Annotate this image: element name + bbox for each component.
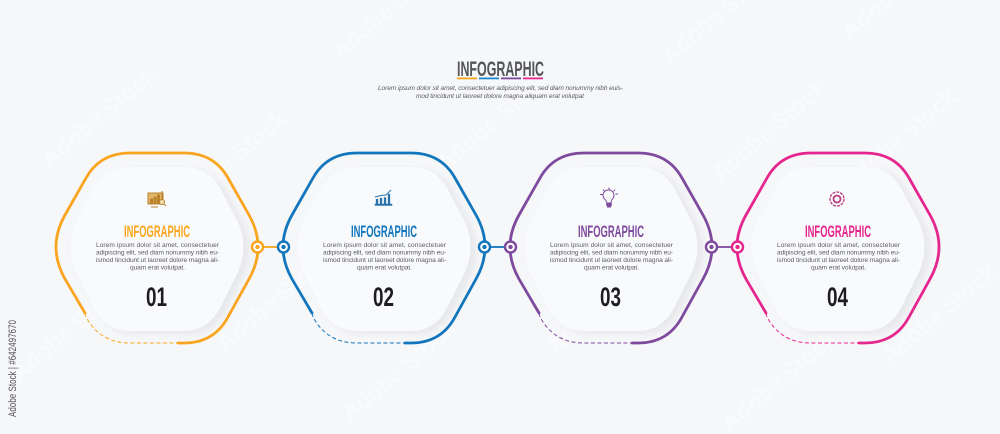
watermarks: Adobe Stock [167, 105, 291, 216]
icon: light bulb [600, 188, 618, 207]
description 3: adipiscing elit, sed diam nonummy nibh eu- [550, 250, 673, 256]
inner hexagon card 1 [70, 167, 244, 331]
watermarks: Adobe Stock [707, 75, 831, 186]
description 2: ismod tincidunt ut laoreet dolore magna ali- [323, 257, 446, 264]
description 2: Lorem ipsum dolor sit amet, consectetuer [323, 242, 447, 249]
watermarks: Adobe Stock [37, 61, 161, 172]
watermarks: Adobe Stock [7, 275, 131, 386]
subtitle [378, 85, 624, 100]
icon: gear [830, 192, 844, 206]
connector: step 2 to 3 [479, 242, 516, 252]
number 4: 04 [827, 282, 848, 312]
watermarks: Adobe Stock [837, 83, 961, 194]
heading 1: INFOGRAPHIC [124, 223, 190, 241]
description 1: quam erat volutpat. [130, 264, 185, 272]
dashed segment 4 [766, 313, 859, 343]
stock credit: Adobe Stock | #642497670 [7, 320, 19, 417]
connector: step 1 to 2 [252, 242, 289, 252]
subtitle: mod tincidunt ut laoreet dolore magna aliquam erat volutpat [416, 93, 585, 100]
panel: step 1 [56, 153, 258, 343]
dashed segment 2 [312, 313, 405, 343]
description 1: ismod tincidunt ut laoreet dolore magna ali- [96, 257, 219, 264]
watermarks: Adobe Stock [432, 65, 556, 176]
description 3: ismod tincidunt ut laoreet dolore magna ali- [550, 257, 673, 264]
description 1 [96, 242, 220, 272]
number 3: 03 [600, 282, 621, 312]
title [457, 58, 544, 81]
description 3 [550, 242, 674, 272]
panel: step 3 [510, 153, 712, 343]
description 2 [323, 242, 447, 272]
description 2: adipiscing elit, sed diam nonummy nibh eu- [323, 250, 446, 256]
number 2: 02 [373, 282, 394, 312]
outline 1 [56, 153, 258, 343]
description 2: quam erat volutpat. [357, 264, 412, 272]
heading 3: INFOGRAPHIC [578, 223, 644, 241]
dashed segment 3 [539, 313, 632, 343]
description 1: adipiscing elit, sed diam nonummy nibh eu- [96, 250, 219, 256]
description 4: adipiscing elit, sed diam nonummy nibh eu- [777, 250, 900, 256]
icon: growth chart [375, 190, 392, 206]
panel: step 2 [283, 153, 485, 343]
dashed segment 1 [85, 313, 178, 343]
description 4: quam erat volutpat. [811, 264, 866, 272]
watermarks: Adobe Stock [877, 258, 1000, 369]
watermarks: Adobe Stock [212, 245, 336, 356]
outline 4 [737, 153, 939, 343]
description 4: ismod tincidunt ut laoreet dolore magna ali- [777, 257, 900, 264]
title: INFOGRAPHIC [457, 58, 544, 81]
inner hexagon card 4 [752, 167, 924, 331]
inner hexagon card 3 [524, 167, 698, 331]
connector: step 3 to 4 [706, 242, 743, 252]
description 4 [777, 242, 901, 272]
description 4: Lorem ipsum dolor sit amet, consectetuer [777, 242, 901, 249]
description 3: quam erat volutpat. [584, 264, 639, 272]
inner hexagon card 2 [298, 167, 470, 331]
watermarks: Adobe Stock [717, 325, 841, 434]
outline 3 [510, 153, 712, 343]
icon: chart with magnifier [148, 191, 166, 207]
description 3: Lorem ipsum dolor sit amet, consectetuer [550, 242, 674, 249]
outline 2 [283, 153, 485, 343]
heading 2: INFOGRAPHIC [351, 223, 417, 241]
description 1: Lorem ipsum dolor sit amet, consectetuer [96, 242, 220, 249]
subtitle: Lorem ipsum dolor sit amet, consectetuer adipiscing elit, sed diam nonummy nibh euis- [378, 85, 624, 92]
number 1: 01 [146, 282, 167, 312]
watermarks: Adobe Stock [337, 315, 461, 426]
heading 4: INFOGRAPHIC [805, 223, 871, 241]
panel: step 4 [737, 153, 939, 343]
watermarks: Adobe Stock [542, 248, 666, 359]
